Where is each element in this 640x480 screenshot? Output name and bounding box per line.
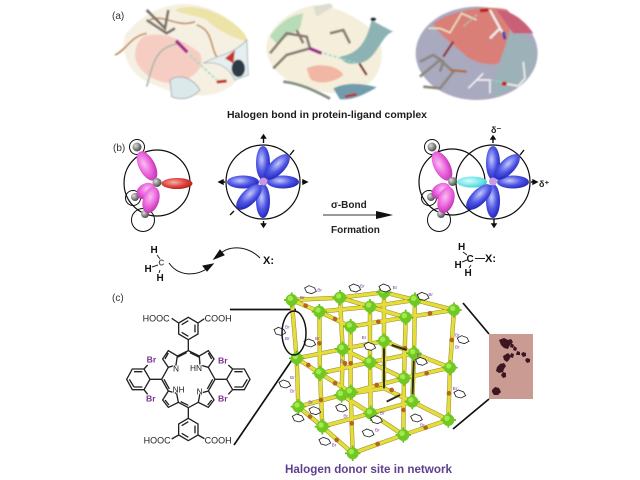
bromine labels: Br bbox=[290, 375, 295, 380]
arrow: electron from halogen bbox=[214, 248, 260, 259]
bromine labels: Br bbox=[343, 414, 348, 419]
panel: protein-ligand complex 2 bbox=[266, 3, 393, 99]
molecule: methyl halide: X: bbox=[485, 253, 496, 265]
molecule: methyl halide bbox=[454, 242, 496, 279]
molecule: dibromo porphyrin with isophthalic acid groups bbox=[127, 314, 250, 445]
molecule: dibromo porphyrin with isophthalic acid groups: N bbox=[197, 386, 203, 396]
molecule: methyl radical: H bbox=[144, 264, 152, 275]
bromine labels: Br bbox=[332, 443, 337, 448]
bromine labels: Br bbox=[375, 428, 380, 433]
diagram: methyl radical orbitals bbox=[124, 140, 192, 232]
bromine labels: Br bbox=[285, 324, 290, 329]
bromine labels: Br bbox=[417, 353, 422, 358]
bromine labels: Br bbox=[420, 423, 425, 428]
molecule: methyl radical: H bbox=[150, 245, 158, 256]
molecule: dibromo porphyrin with isophthalic acid groups: Br bbox=[218, 355, 228, 365]
molecule: methyl halide: C bbox=[466, 254, 474, 265]
molecule: dibromo porphyrin with isophthalic acid groups: HOOC bbox=[143, 314, 170, 324]
molecule: methyl radical: C bbox=[158, 258, 164, 268]
bromine labels: Br bbox=[315, 336, 320, 341]
diagram: halogen radical orbitals bbox=[219, 135, 307, 227]
callout: highlighted donor site ellipse bbox=[282, 311, 306, 355]
molecule: dibromo porphyrin with isophthalic acid groups: Br bbox=[147, 355, 157, 365]
label: panel a: (a) bbox=[112, 11, 124, 22]
bromine labels: Br bbox=[317, 288, 322, 293]
bromine labels: Br bbox=[455, 333, 460, 338]
chart: halogen bonded network lattice bbox=[274, 284, 469, 461]
molecule: dibromo porphyrin with isophthalic acid groups: NH bbox=[173, 385, 185, 395]
molecule: dibromo porphyrin with isophthalic acid groups: Br bbox=[146, 393, 156, 403]
molecule: dibromo porphyrin with isophthalic acid groups: COOH bbox=[205, 435, 232, 445]
arrow: sigma bond formation: σ-Bond bbox=[331, 200, 367, 211]
molecule: methyl halide: H bbox=[458, 242, 465, 253]
photo: crystals bbox=[489, 334, 533, 399]
bromine labels: Br bbox=[340, 358, 345, 363]
panel: protein-ligand complex 3 bbox=[416, 7, 538, 100]
molecule: dibromo porphyrin with isophthalic acid groups: HN bbox=[190, 363, 202, 373]
bromine labels: Br bbox=[428, 292, 433, 297]
dibromophenyl rings bbox=[274, 284, 469, 445]
molecule: dibromo porphyrin with isophthalic acid groups: Br bbox=[218, 394, 228, 404]
molecule: methyl radical: H bbox=[156, 273, 164, 284]
bromine labels: Br bbox=[360, 284, 365, 289]
bromine labels: Br bbox=[362, 335, 367, 340]
back bars shaded bbox=[384, 341, 414, 402]
bromine labels: Br bbox=[453, 386, 458, 391]
panel: protein-ligand complex 1 bbox=[115, 4, 248, 99]
label: delta plus: δ⁺ bbox=[539, 179, 549, 189]
halogen bond sites bbox=[303, 303, 454, 446]
arrow: sigma bond formation: Formation bbox=[331, 225, 380, 236]
molecule: methyl halide: H bbox=[464, 268, 472, 279]
bromine labels: Br bbox=[290, 388, 295, 393]
molecule: halogen radical: X: bbox=[263, 255, 274, 267]
molecule: dibromo porphyrin with isophthalic acid groups: COOH bbox=[205, 314, 232, 324]
molecule: methyl radical bbox=[144, 245, 164, 284]
molecule: dibromo porphyrin with isophthalic acid groups: N bbox=[173, 363, 179, 373]
label: delta minus: δ⁻ bbox=[491, 125, 501, 135]
callout: lines from molecule to network bbox=[230, 310, 296, 445]
bromine labels: Br bbox=[393, 285, 398, 290]
diagram: carbon-halogen sigma bond orbitals bbox=[419, 136, 537, 232]
bromine labels: Br bbox=[285, 336, 290, 341]
callout: lines from network to crystal photo bbox=[453, 303, 489, 429]
arrow: electron to centre bbox=[169, 263, 213, 274]
bromine labels: Br bbox=[308, 400, 313, 405]
label: panel b: (b) bbox=[113, 143, 125, 154]
bromine labels: Br bbox=[380, 410, 385, 415]
bromine labels bbox=[285, 284, 460, 448]
caption: protein-ligand: Halogen bond in protein-ligand complex bbox=[227, 109, 427, 121]
bromine labels: Br bbox=[300, 295, 305, 300]
label: panel c: (c) bbox=[112, 293, 124, 304]
bromine labels: Br bbox=[455, 344, 460, 349]
nodes bbox=[284, 285, 462, 461]
caption: network: Halogen donor site in network bbox=[285, 462, 452, 476]
arrow: sigma bond formation bbox=[323, 200, 393, 236]
molecule: methyl halide: H bbox=[454, 260, 462, 271]
molecule: dibromo porphyrin with isophthalic acid groups: HOOC bbox=[144, 435, 171, 445]
